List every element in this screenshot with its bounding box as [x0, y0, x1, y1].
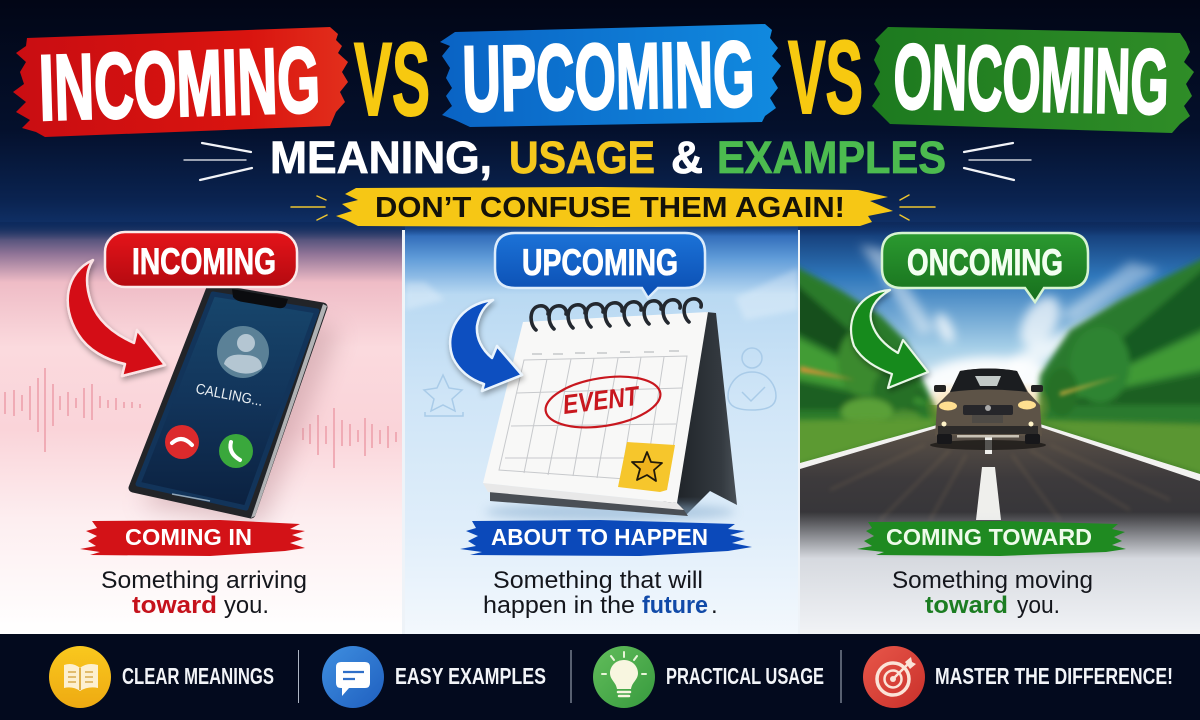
faint star icon: [424, 375, 463, 416]
subtitle: [270, 132, 946, 183]
right blurred trees: [1036, 250, 1200, 425]
calendar page: [483, 312, 708, 503]
banner right accent lines: [900, 195, 935, 220]
green curved arrow: [851, 290, 928, 388]
subtitle left accent lines: [184, 143, 252, 180]
upcoming definition: future: [642, 592, 708, 619]
about to happen brush banner: ABOUT TO HAPPEN: [491, 524, 708, 550]
roadside scenery: [780, 245, 1200, 485]
icon: speech bubble: [322, 646, 384, 708]
subtitle: &: [671, 132, 703, 183]
incoming definition: [101, 567, 307, 619]
incoming label pill: INCOMING: [132, 241, 276, 282]
title: incoming brush: INCOMING: [38, 28, 321, 140]
header background: [0, 0, 1200, 235]
caller avatar: [217, 326, 269, 378]
panel: incoming: [0, 222, 402, 634]
oncoming car: [924, 368, 1052, 450]
incoming label pill: [105, 232, 297, 287]
footer divider: [298, 650, 300, 703]
light streaks: [800, 366, 1120, 396]
oncoming label pill: ONCOMING: [907, 242, 1063, 283]
car body: [935, 368, 1042, 436]
oncoming label pill: [882, 233, 1088, 302]
oncoming definition: you.: [1017, 592, 1060, 619]
phone notch: [232, 289, 288, 308]
oncoming definition: toward: [925, 592, 1008, 619]
blue curved arrow: [450, 300, 522, 391]
background waveform: [5, 368, 396, 468]
warning banner: DON’T CONFUSE THEM AGAIN!: [375, 192, 845, 224]
upcoming definition: Something that will: [493, 567, 703, 594]
coming toward brush banner: [857, 521, 1126, 556]
calendar grid: [499, 356, 687, 482]
footer text: practical usage: PRACTICAL USAGE: [666, 663, 824, 689]
panel separators base: [0, 230, 1200, 634]
subtitle: EXAMPLES: [717, 132, 946, 183]
title: vs two: VS: [788, 20, 863, 136]
road edge lines: [800, 424, 1200, 481]
icon: target: [863, 646, 925, 708]
incoming definition: Something arriving: [101, 567, 307, 594]
phone: [133, 288, 327, 518]
warning banner: [336, 187, 893, 227]
grass verges: [800, 416, 1200, 474]
footer text: easy examples: EASY EXAMPLES: [395, 663, 546, 689]
pale light wedges: [405, 268, 798, 320]
title: upcoming brush: UPCOMING: [462, 22, 755, 131]
icon: light bulb: [593, 646, 655, 708]
red curved arrow: [68, 260, 165, 376]
upcoming definition: [483, 567, 718, 619]
event circled: [542, 369, 664, 435]
faint person icon: [728, 348, 776, 410]
phone shadow: [140, 320, 340, 525]
panel: oncoming: [800, 230, 1200, 618]
title: vs one: VS: [354, 22, 430, 138]
title: incoming brush: [13, 27, 348, 140]
coming in brush banner: [80, 520, 305, 556]
sky streaks and clouds: [860, 245, 1175, 413]
incoming definition: toward: [132, 592, 217, 619]
calendar stand: [660, 312, 737, 515]
footer divider: [570, 650, 572, 703]
bottom fade: [800, 512, 1200, 634]
left blurred trees: [800, 264, 938, 425]
event circled: EVENT: [561, 381, 642, 420]
about to happen brush banner: [460, 520, 752, 556]
calling label: CALLING...: [194, 381, 264, 410]
upcoming definition: happen in the: [483, 592, 635, 619]
footer bar: [0, 634, 1200, 720]
banner left accent lines: [291, 196, 327, 220]
sticky note: [618, 442, 675, 492]
calendar rings: [531, 299, 701, 330]
footer divider: [840, 650, 842, 703]
road centre dashes: [976, 437, 1001, 520]
title: upcoming brush: [440, 22, 781, 131]
icon: open book: [49, 646, 111, 708]
subtitle: USAGE: [509, 132, 655, 183]
panel: upcoming: [405, 222, 798, 634]
road motion streaks: [830, 445, 1170, 520]
upcoming label pill: UPCOMING: [522, 242, 678, 283]
coming in brush banner: COMING IN: [125, 524, 252, 550]
oncoming definition: [892, 567, 1093, 619]
incoming definition: you.: [224, 592, 269, 619]
upcoming label pill: [495, 233, 705, 298]
footer text: clear meanings: CLEAR MEANINGS: [122, 663, 274, 689]
calendar: [483, 299, 737, 521]
decline button: [165, 425, 199, 459]
road: [800, 425, 1200, 560]
accept button: [219, 434, 253, 468]
subtitle right accent lines: [964, 143, 1031, 180]
oncoming definition: Something moving: [892, 567, 1093, 594]
coming toward brush banner: COMING TOWARD: [886, 524, 1092, 550]
subtitle: MEANING,: [270, 132, 492, 183]
upcoming definition: .: [711, 592, 718, 619]
